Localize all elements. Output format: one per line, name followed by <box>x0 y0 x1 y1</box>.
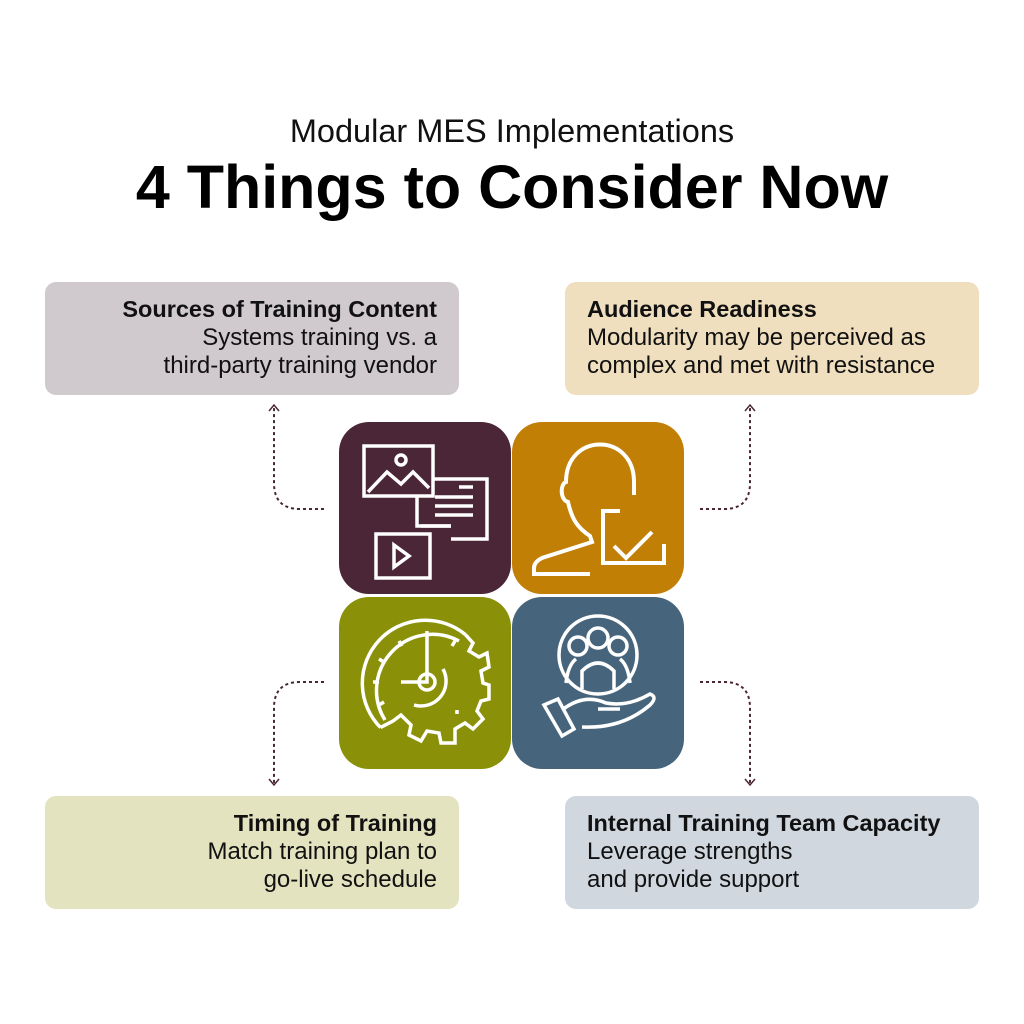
panel: sources of training content: Systems training vs. a <box>202 324 437 350</box>
panel: audience readiness: complex and met with resistance <box>587 352 935 379</box>
icon tile: clock gear <box>339 597 511 769</box>
panel: internal training team capacity: Internal Training Team Capacity <box>587 810 940 836</box>
icon tile: media content <box>339 422 511 594</box>
panel: audience readiness <box>565 282 979 395</box>
panel: sources of training content: third-party training vendor <box>164 352 437 379</box>
title: 4 Things to Consider Now <box>136 153 888 221</box>
panel: internal training team capacity <box>565 796 979 909</box>
panel: sources of training content: Sources of Training Content <box>122 296 437 322</box>
panel: timing of training: Timing of Training <box>234 810 437 836</box>
panel: audience readiness: Modularity may be perceived as <box>587 324 926 350</box>
icon tile: team in hand <box>512 597 684 769</box>
panel: timing of training: Match training plan to <box>208 838 437 864</box>
panel: timing of training <box>45 796 459 909</box>
panel: internal training team capacity: Leverage strengths <box>587 838 792 864</box>
panel: sources of training content <box>45 282 459 395</box>
panel: internal training team capacity: and provide support <box>587 866 799 893</box>
icon tile: audience check <box>512 422 684 594</box>
subtitle: Modular MES Implementations <box>290 113 734 149</box>
panel: audience readiness: Audience Readiness <box>587 296 817 322</box>
panel: timing of training: go-live schedule <box>264 866 437 893</box>
